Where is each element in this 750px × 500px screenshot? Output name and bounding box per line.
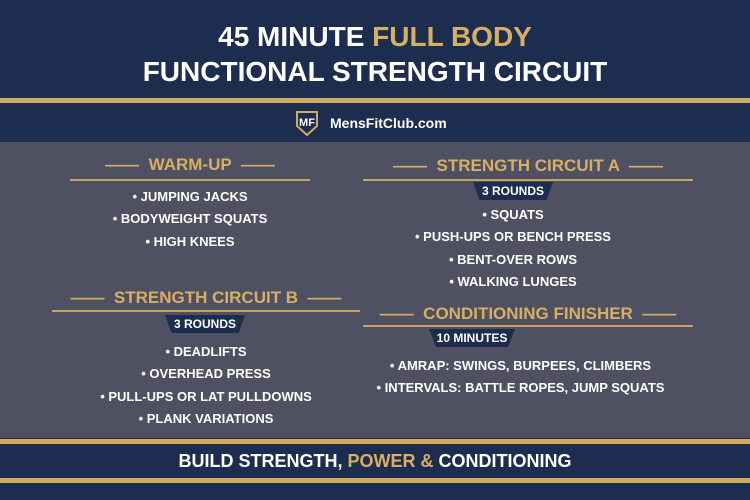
panel: strength circuit A: • BENT-OVER ROWS — [449, 252, 577, 267]
panel: conditioning finisher: • AMRAP: SWINGS, BURPEES, CLIMBERS — [390, 358, 651, 373]
panel: conditioning finisher: —— CONDITIONING FINISHER —— — [380, 304, 676, 323]
panel: warm-up: —— WARM-UP —— — [105, 155, 275, 174]
panel: warm-up: • HIGH KNEES — [145, 234, 235, 249]
panel: strength circuit B: —— STRENGTH CIRCUIT B —— — [70, 288, 342, 307]
logo — [296, 111, 447, 136]
panel: conditioning finisher: 10 MINUTES — [437, 331, 507, 345]
panel: strength circuit A: • PUSH-UPS OR BENCH PRESS — [415, 229, 611, 244]
panel: conditioning finisher — [363, 304, 693, 395]
icon: shield — [296, 111, 318, 136]
title — [143, 21, 607, 87]
panel: strength circuit B: 3 ROUNDS — [174, 317, 236, 331]
panel: strength circuit B: • OVERHEAD PRESS — [141, 366, 271, 381]
panel: strength circuit A: 3 ROUNDS — [482, 184, 544, 198]
footer tagline: BUILD STRENGTH, POWER & CONDITIONING — [178, 451, 572, 471]
site name: MensFitClub.com — [330, 115, 447, 131]
panel: warm-up — [70, 155, 310, 249]
header band — [0, 0, 750, 98]
logo band — [0, 103, 750, 142]
panel: strength circuit B: • DEADLIFTS — [165, 344, 247, 359]
panel: warm-up: • JUMPING JACKS — [132, 189, 248, 204]
panel: strength circuit A — [363, 156, 693, 289]
panel: strength circuit B — [52, 288, 360, 426]
panel: conditioning finisher: • INTERVALS: BATTLE ROPES, JUMP SQUATS — [377, 380, 664, 395]
icon: shield: MF — [299, 117, 315, 129]
panel: strength circuit A: • SQUATS — [482, 207, 544, 222]
panel: strength circuit A: • WALKING LUNGES — [449, 274, 577, 289]
panel: warm-up: • BODYWEIGHT SQUATS — [113, 211, 267, 226]
panel: strength circuit B: • PULL-UPS OR LAT PULLDOWNS — [100, 389, 312, 404]
title: 45 MINUTE FULL BODY — [218, 21, 532, 52]
panel: strength circuit A: —— STRENGTH CIRCUIT A —— — [393, 156, 663, 175]
panel: strength circuit B: • PLANK VARIATIONS — [139, 411, 273, 426]
footer band — [0, 438, 750, 500]
title: FUNCTIONAL STRENGTH CIRCUIT — [143, 56, 607, 87]
